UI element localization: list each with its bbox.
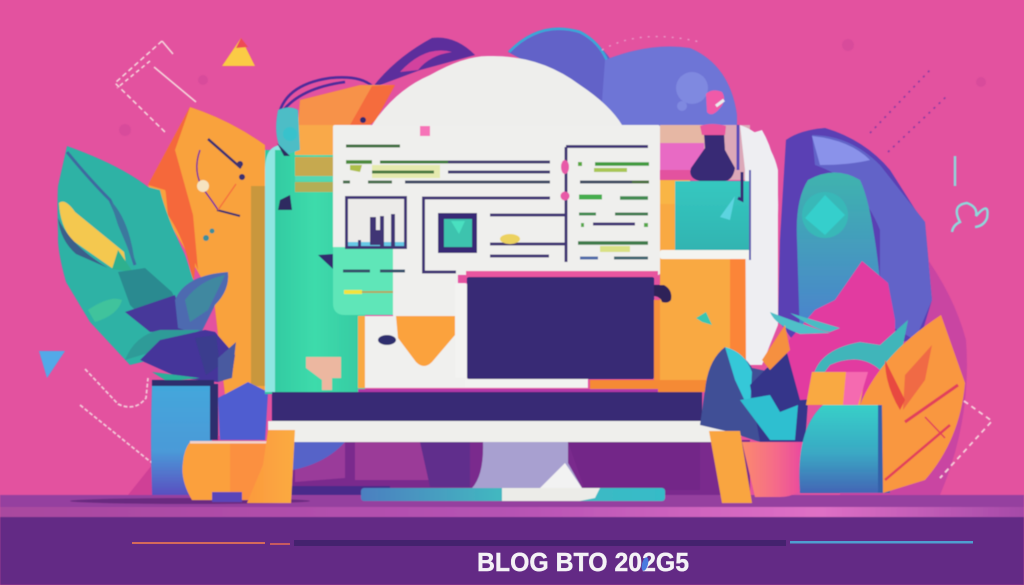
white paper backdrop bbox=[372, 56, 622, 125]
green card lines bbox=[343, 271, 405, 292]
icon: peach stand bbox=[306, 357, 341, 390]
pot: pink right bbox=[742, 442, 811, 497]
pot: orange left bbox=[182, 441, 270, 502]
decoration: dashed lines lower left bbox=[80, 369, 158, 467]
icon: dark oval bbox=[378, 335, 396, 345]
leaf: orange left bbox=[148, 107, 265, 395]
monitor: dark bar bbox=[272, 392, 702, 422]
hair swirl left bbox=[278, 77, 372, 120]
icon: blue triangle bbox=[39, 351, 65, 378]
icon: pink square bbox=[420, 126, 430, 136]
dotted arc bbox=[602, 37, 700, 50]
footer rule bbox=[132, 540, 973, 546]
pot: blue left bbox=[151, 380, 268, 495]
orange back block bbox=[295, 85, 395, 160]
monitor: left column bbox=[265, 108, 365, 394]
icon: yellow triangle bbox=[222, 38, 255, 66]
top right color blocks bbox=[660, 125, 778, 250]
decoration: dashed line lower right bbox=[940, 401, 992, 478]
text block: left paragraph bbox=[343, 162, 550, 182]
icon: squiggle right bbox=[952, 156, 988, 232]
monitor: stand bbox=[472, 442, 582, 488]
background shadow shapes bbox=[128, 225, 967, 498]
text block: right column bbox=[578, 164, 649, 258]
right column frame bbox=[566, 146, 648, 262]
lower white panel bbox=[358, 283, 588, 388]
dark screen bbox=[466, 271, 671, 379]
rock: purple bbox=[778, 128, 932, 350]
leaf: teal large bbox=[58, 146, 195, 365]
text lines: center bbox=[490, 215, 566, 256]
monitor: base bbox=[361, 488, 665, 501]
monitor: white bar bbox=[268, 421, 741, 442]
blue arch shape bbox=[508, 28, 622, 125]
yellow highlight bbox=[500, 234, 520, 244]
icon: pink gem bbox=[706, 90, 724, 114]
teal screen bbox=[660, 125, 752, 260]
right orange block bbox=[590, 200, 746, 392]
decoration: dashed frame top left bbox=[115, 41, 196, 134]
small bracket frame bbox=[424, 198, 550, 272]
decoration: pale dots bbox=[119, 39, 986, 136]
plant: dark leaves bbox=[118, 268, 236, 382]
monitor: left orange leg bbox=[247, 430, 295, 503]
title: BLOG BTO 202G5 bbox=[477, 547, 689, 577]
blue cloud bbox=[600, 46, 737, 128]
icons: pink markers bbox=[560, 160, 570, 200]
leaf: orange right bbox=[860, 315, 965, 493]
monitor: right orange leg bbox=[709, 431, 752, 503]
chart: bar chart bbox=[346, 198, 406, 248]
plant: dark leaves right bbox=[700, 347, 808, 442]
leaf: magenta bbox=[762, 261, 908, 400]
icon: teal square bbox=[438, 213, 477, 253]
lower green card bbox=[333, 247, 393, 315]
icon: orange shield bbox=[396, 316, 455, 366]
pot: teal right bbox=[799, 372, 890, 493]
decoration: dotted lines upper right bbox=[870, 70, 948, 152]
icon: blue accent bbox=[640, 556, 650, 572]
heading line bbox=[346, 144, 400, 148]
floor bbox=[0, 495, 1024, 585]
purple swirl top bbox=[372, 38, 475, 88]
main document panel bbox=[333, 125, 660, 316]
icon: dark bottle bbox=[690, 124, 735, 181]
white right column bbox=[745, 130, 778, 365]
